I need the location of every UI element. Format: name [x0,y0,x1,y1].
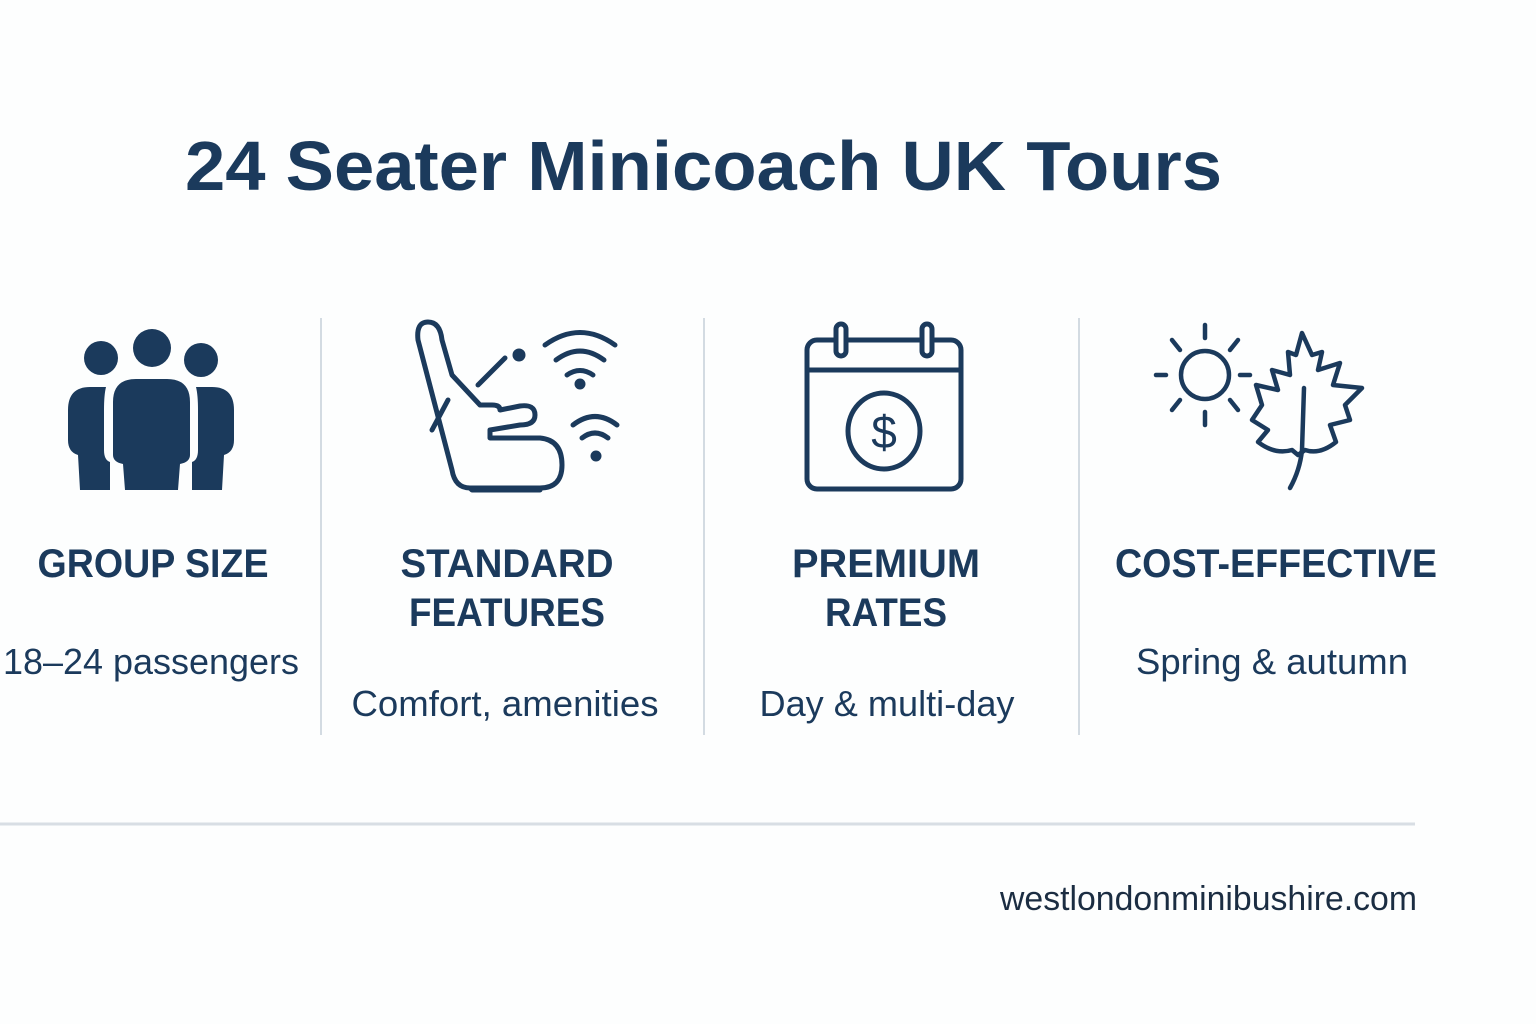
panel: standard features: FEATURES [409,591,605,635]
footer url: westlondonminibushire.com [999,880,1417,918]
icon: calendar with dollar: $ [871,406,897,458]
panel: premium rates [760,324,1014,724]
heading: cost-effective: COST-EFFECTIVE [1115,542,1437,586]
icon: seat with wifi [418,322,617,490]
panel: premium rates: RATES [825,591,947,635]
icon: sun and leaf [1156,325,1362,488]
heading: premium rates: PREMIUM [792,542,980,586]
panel: cost-effective [1115,325,1437,682]
text: cost-effective: Spring & autumn [1136,641,1408,682]
text: group size: 18–24 passengers [3,641,299,682]
heading: standard features: STANDARD [400,542,614,586]
icon: people [68,329,234,490]
icon: calendar with dollar [807,324,961,489]
title: 24 Seater Minicoach UK Tours [185,127,1222,205]
panel: group size [3,329,299,682]
text: standard features: Comfort, amenities [352,683,658,724]
panel: standard features [352,322,658,724]
heading: group size: GROUP SIZE [38,542,268,586]
text: premium rates: Day & multi-day [760,683,1014,724]
